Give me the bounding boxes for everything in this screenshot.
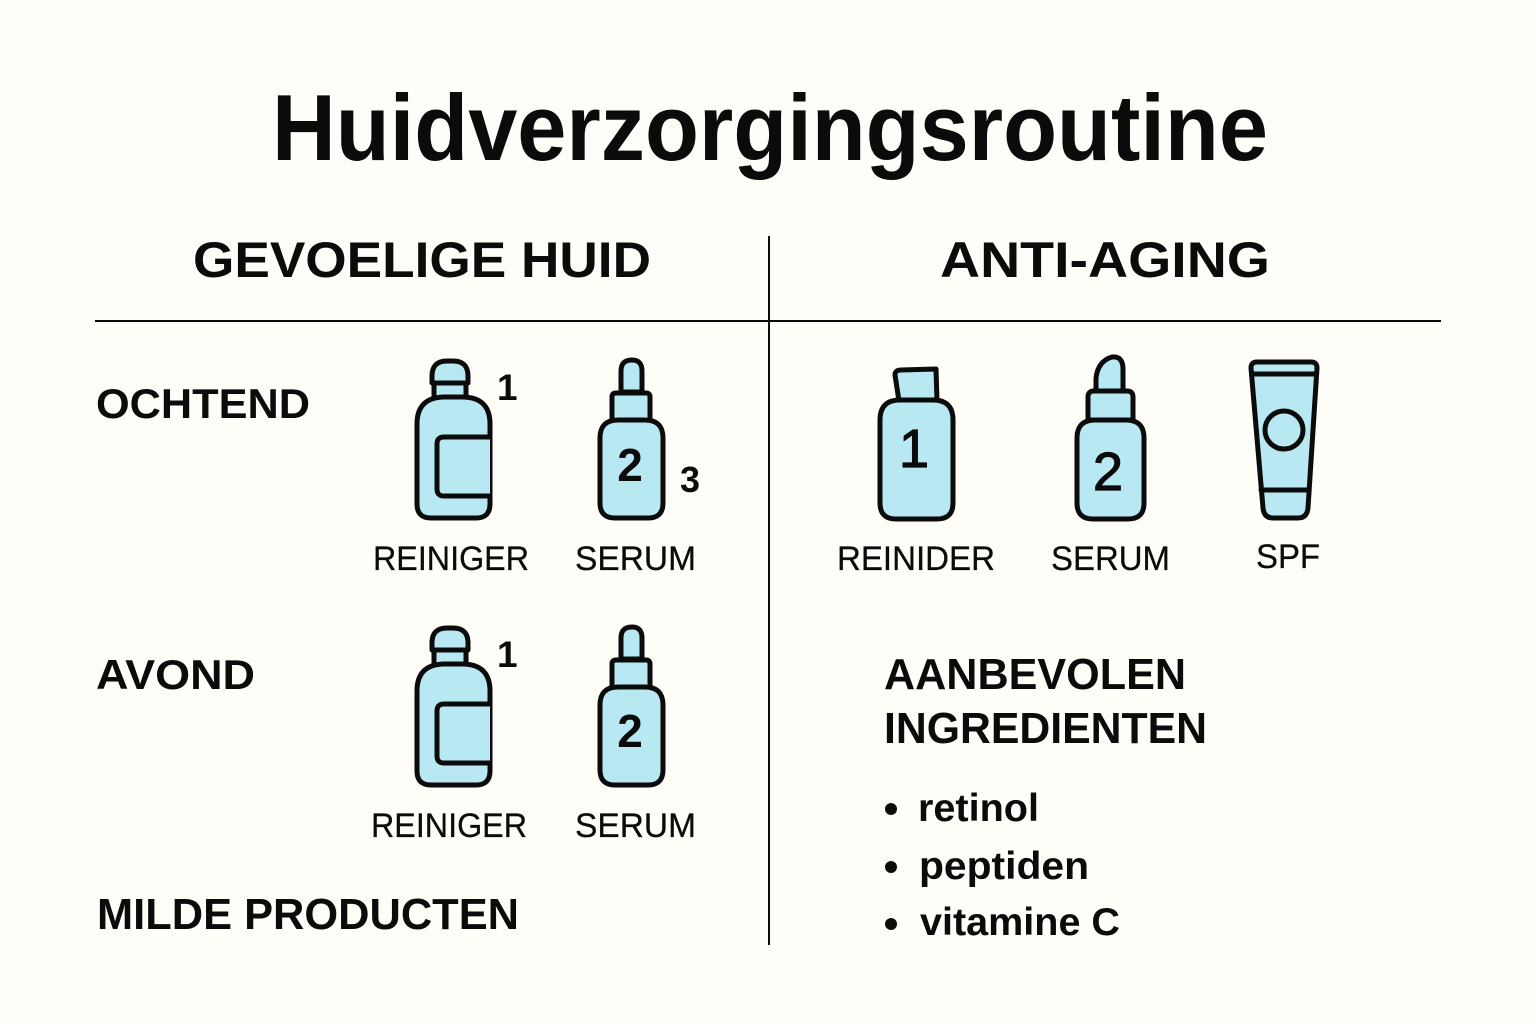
column heading: gevoelige huid: GEVOELIGE HUID	[193, 232, 651, 288]
title: Huidverzorgingsroutine	[272, 75, 1268, 180]
icon: serum bottle morning	[600, 360, 663, 518]
label: reinider: REINIDER	[837, 540, 995, 578]
panel: gevoelige huid	[96, 360, 700, 939]
icon: serum bottle evening	[600, 627, 663, 785]
icon: cleanser bottle evening	[417, 628, 490, 785]
heading: aanbevolen ingredienten: INGREDIENTEN	[884, 704, 1207, 753]
icon: cleanser bottle	[880, 369, 953, 519]
icon: cleanser bottle morning	[417, 361, 490, 518]
number 2 evening: 2	[617, 705, 643, 757]
list: ingredients: vitamine C	[920, 901, 1120, 944]
heading: aanbevolen ingredienten	[884, 650, 1207, 753]
column heading: anti-aging: ANTI-AGING	[940, 232, 1270, 288]
note: milde producten: MILDE PRODUCTEN	[97, 890, 519, 939]
label: serum morning: SERUM	[575, 540, 696, 578]
number 1: 1	[899, 419, 929, 479]
label: reiniger evening: REINIGER	[371, 807, 527, 845]
icon: serum bottle	[1077, 357, 1144, 519]
list: ingredients: retinol	[918, 787, 1039, 830]
label: reiniger morning: REINIGER	[373, 540, 529, 578]
panel: anti-aging	[837, 357, 1320, 944]
label: spf: SPF	[1256, 538, 1320, 576]
number 2: 2	[617, 439, 643, 491]
number 3: 3	[680, 459, 700, 500]
icon: spf tube	[1251, 362, 1317, 518]
label: serum evening: SERUM	[575, 807, 696, 845]
list: ingredients	[885, 787, 1120, 944]
label: serum: SERUM	[1051, 540, 1170, 578]
row label: avond: AVOND	[96, 651, 255, 698]
row label: ochtend: OCHTEND	[96, 380, 310, 427]
number 1 evening: 1	[497, 634, 518, 675]
heading: aanbevolen ingredienten: AANBEVOLEN	[884, 650, 1186, 699]
number 2: 2	[1093, 442, 1123, 502]
list: ingredients: peptiden	[919, 845, 1089, 888]
number 1: 1	[497, 367, 518, 408]
